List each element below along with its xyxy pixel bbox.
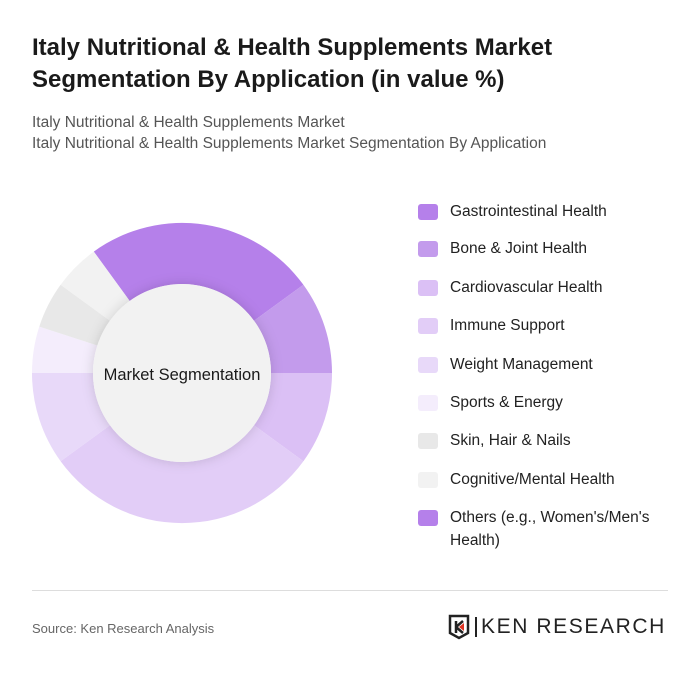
donut chart	[32, 222, 332, 524]
subtitle: Italy Nutritional & Health Supplements Market	[32, 114, 345, 131]
legend	[418, 203, 649, 549]
text: Weight Management	[450, 356, 593, 373]
text: Immune Support	[450, 317, 565, 334]
text: Sports & Energy	[450, 394, 563, 411]
title: Italy Nutritional & Health Supplements Market Segmentation By Application (in value %)	[32, 34, 552, 93]
text: Cognitive/Mental Health	[450, 471, 615, 488]
logo: KEN RESEARCH	[481, 615, 666, 638]
subtitle	[32, 114, 546, 152]
text: Gastrointestinal Health	[450, 203, 607, 220]
donut chart: Market Segmentation	[104, 366, 260, 384]
text: Cardiovascular Health	[450, 279, 602, 296]
source: Source: Ken Research Analysis	[32, 621, 214, 636]
text: Health)	[450, 532, 500, 549]
subtitle: Italy Nutritional & Health Supplements Market Segmentation By Application	[32, 135, 546, 152]
text: Bone & Joint Health	[450, 240, 587, 257]
text: Others (e.g., Women's/Men's	[450, 509, 649, 526]
text: Skin, Hair & Nails	[450, 432, 571, 449]
